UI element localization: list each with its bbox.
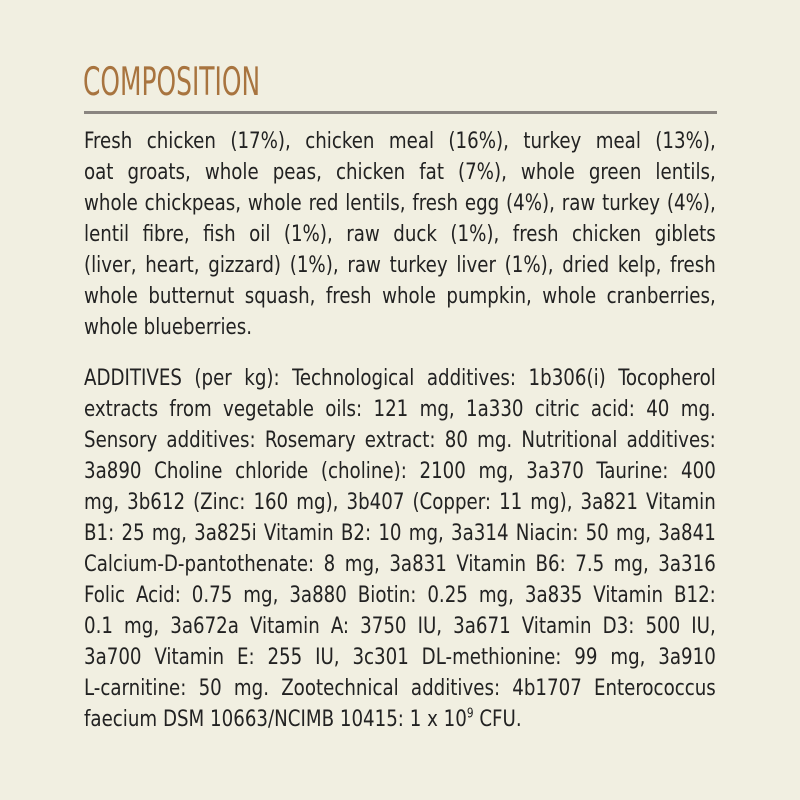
text block: additives: 3a890 Choline chloride (choline): 2100 mg, 3a370 Taurine: 400 [84,458,716,484]
text block: ingredients [84,128,716,340]
text block: additives: extracts from vegetable oils: 121 mg, 1a330 citric acid: 40 mg. [84,396,716,422]
text block: additives: faecium DSM 10663/NCIMB 10415: 1 x 109 CFU. [84,706,522,732]
text block: ingredients: oat groats, whole peas, chicken fat (7%), whole green lentils, [84,159,716,185]
text block: additives: mg, 3b612 (Zinc: 160 mg), 3b407 (Copper: 11 mg), 3a821 Vitamin [84,489,716,515]
text block: additives: L-carnitine: 50 mg. Zootechnical additives: 4b1707 Enterococcus [84,675,716,701]
text block: ingredients: whole butternut squash, fresh whole pumpkin, whole cranberries, [84,283,716,309]
title: COMPOSITION [83,60,260,105]
text block: ingredients: whole blueberries. [84,314,252,340]
text block: ingredients: whole chickpeas, whole red lentils, fresh egg (4%), raw turkey (4%), [84,190,716,216]
text block: ingredients: Fresh chicken (17%), chicken meal (16%), turkey meal (13%), [84,128,716,154]
text block: additives: ADDITIVES (per kg): Technological additives: 1b306(i) Tocopherol [84,365,716,391]
text block: additives: Sensory additives: Rosemary extract: 80 mg. Nutritional additives: [84,427,716,453]
text block: additives: Folic Acid: 0.75 mg, 3a880 Biotin: 0.25 mg, 3a835 Vitamin B12: [84,582,716,608]
text block: additives [84,365,716,732]
text block: additives: 3a700 Vitamin E: 255 IU, 3c301 DL-methionine: 99 mg, 3a910 [84,644,716,670]
text block: ingredients: lentil fibre, fish oil (1%), raw duck (1%), fresh chicken giblets [84,221,716,247]
text block: additives: Calcium-D-pantothenate: 8 mg, 3a831 Vitamin B6: 7.5 mg, 3a316 [84,551,716,577]
text block: additives: B1: 25 mg, 3a825i Vitamin B2: 10 mg, 3a314 Niacin: 50 mg, 3a841 [84,520,716,546]
text block: additives: 0.1 mg, 3a672a Vitamin A: 3750 IU, 3a671 Vitamin D3: 500 IU, [84,613,716,639]
text block: ingredients: (liver, heart, gizzard) (1%), raw turkey liver (1%), dried kelp, fresh [84,252,716,278]
